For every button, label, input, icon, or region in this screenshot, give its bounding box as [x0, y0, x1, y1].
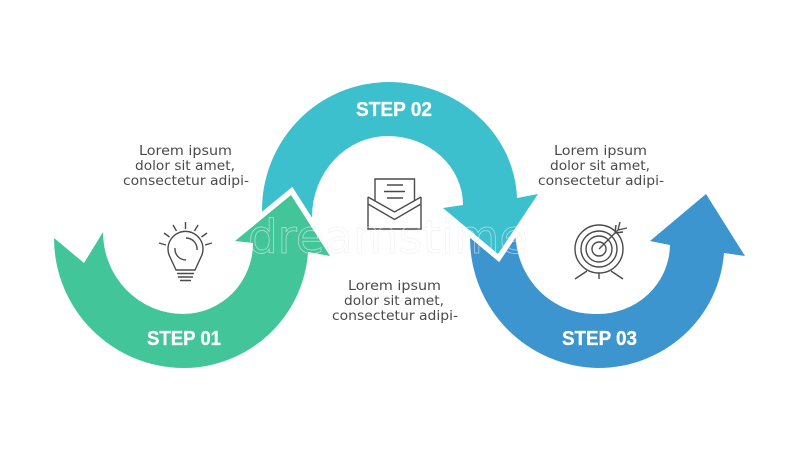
text block: left: consectetur adipi- — [123, 174, 249, 189]
text block: right: consectetur adipi- — [538, 174, 664, 189]
text block: left — [123, 144, 249, 189]
heading: step 02: STEP 02 — [356, 98, 432, 121]
icon: envelope — [368, 179, 421, 229]
text block: middle: dolor sit amet, — [344, 294, 444, 309]
arrow: step 02 teal — [262, 82, 538, 254]
text block: right: dolor sit amet, — [550, 159, 650, 174]
text block: right: Lorem ipsum — [554, 144, 647, 159]
icon: light bulb — [159, 222, 212, 280]
text block: left: Lorem ipsum — [139, 144, 232, 159]
text block: middle — [332, 279, 458, 324]
text block: left: dolor sit amet, — [135, 159, 235, 174]
watermark: dreamstime — [248, 210, 528, 264]
text block: right — [538, 144, 664, 189]
arrow: step 01 green — [54, 195, 330, 368]
icon: target — [575, 222, 627, 279]
text block: middle: Lorem ipsum — [348, 279, 441, 294]
arrow: step 03 blue — [470, 194, 745, 368]
heading: step 01: STEP 01 — [147, 327, 221, 350]
text block: middle: consectetur adipi- — [332, 309, 458, 324]
heading: step 03: STEP 03 — [562, 327, 637, 350]
